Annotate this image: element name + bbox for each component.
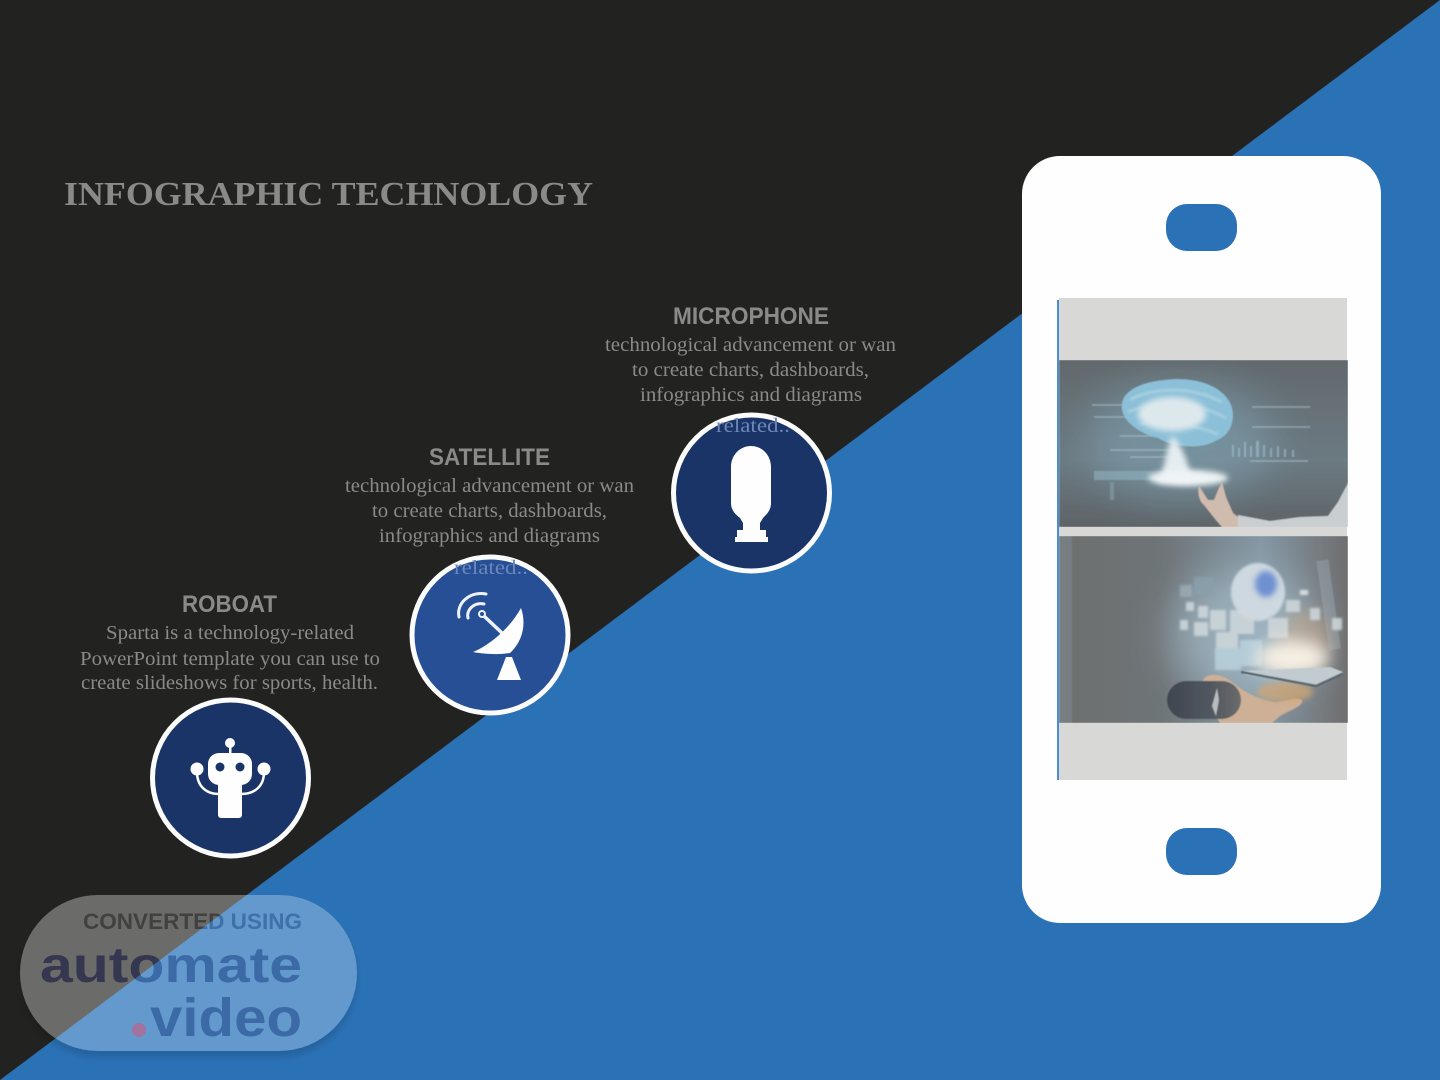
watermark pill: [20, 895, 357, 1051]
description: microphone: [605, 334, 896, 406]
heading: satellite: SATELLITE: [429, 444, 550, 471]
phone home button: [1166, 828, 1237, 875]
hand: [1198, 482, 1242, 527]
brain: [1122, 379, 1233, 446]
hand: [1202, 675, 1302, 723]
description: roboat: PowerPoint template you can use to: [80, 648, 380, 670]
title: INFOGRAPHIC TECHNOLOGY: [64, 176, 593, 213]
image: brain on hand: [1059, 360, 1348, 527]
icon: robot circle: [152, 700, 308, 856]
description: satellite: [345, 475, 634, 547]
icon: satellite circle: [412, 557, 568, 713]
screen left edge: [1057, 300, 1059, 780]
watermark domain: video: [150, 988, 302, 1048]
block: satellite: [345, 444, 634, 713]
globe: [1231, 563, 1285, 621]
icon: satellite circle: related..: [454, 557, 528, 579]
watermark: automate.video: [20, 895, 357, 1057]
heading: microphone: MICROPHONE: [673, 303, 829, 330]
description: roboat: [80, 622, 380, 694]
block: microphone: [605, 303, 896, 571]
description: microphone: infographics and diagrams: [640, 384, 862, 406]
description: satellite: technological advancement or wan: [345, 475, 634, 497]
description: satellite: infographics and diagrams: [379, 525, 600, 547]
description: microphone: technological advancement or wan: [605, 334, 896, 356]
icon: microphone circle: related..: [716, 415, 790, 437]
description: satellite: to create charts, dashboards,: [372, 500, 607, 522]
phone speaker: [1166, 204, 1237, 251]
description: roboat: Sparta is a technology-related: [106, 622, 354, 644]
icon: microphone circle: [674, 415, 830, 571]
phone screen: [1059, 298, 1347, 780]
light burst: [1256, 640, 1328, 676]
dark pill: [1167, 681, 1241, 719]
floating tiles: [1180, 577, 1342, 670]
heading: roboat: ROBOAT: [182, 591, 277, 618]
watermark shadow: [20, 901, 357, 1057]
phone: [1022, 156, 1381, 923]
tablet: [1241, 667, 1343, 686]
watermark dot accent: [132, 1023, 146, 1037]
watermark wordmark: automate: [40, 937, 302, 993]
description: roboat: create slideshows for sports, health.: [81, 672, 378, 694]
block: roboat: [80, 591, 380, 856]
watermark caption: CONVERTED USING: [83, 909, 302, 934]
image: globe and tablet: [1059, 536, 1348, 723]
description: microphone: to create charts, dashboards,: [632, 359, 869, 381]
phone body: [1022, 156, 1381, 923]
